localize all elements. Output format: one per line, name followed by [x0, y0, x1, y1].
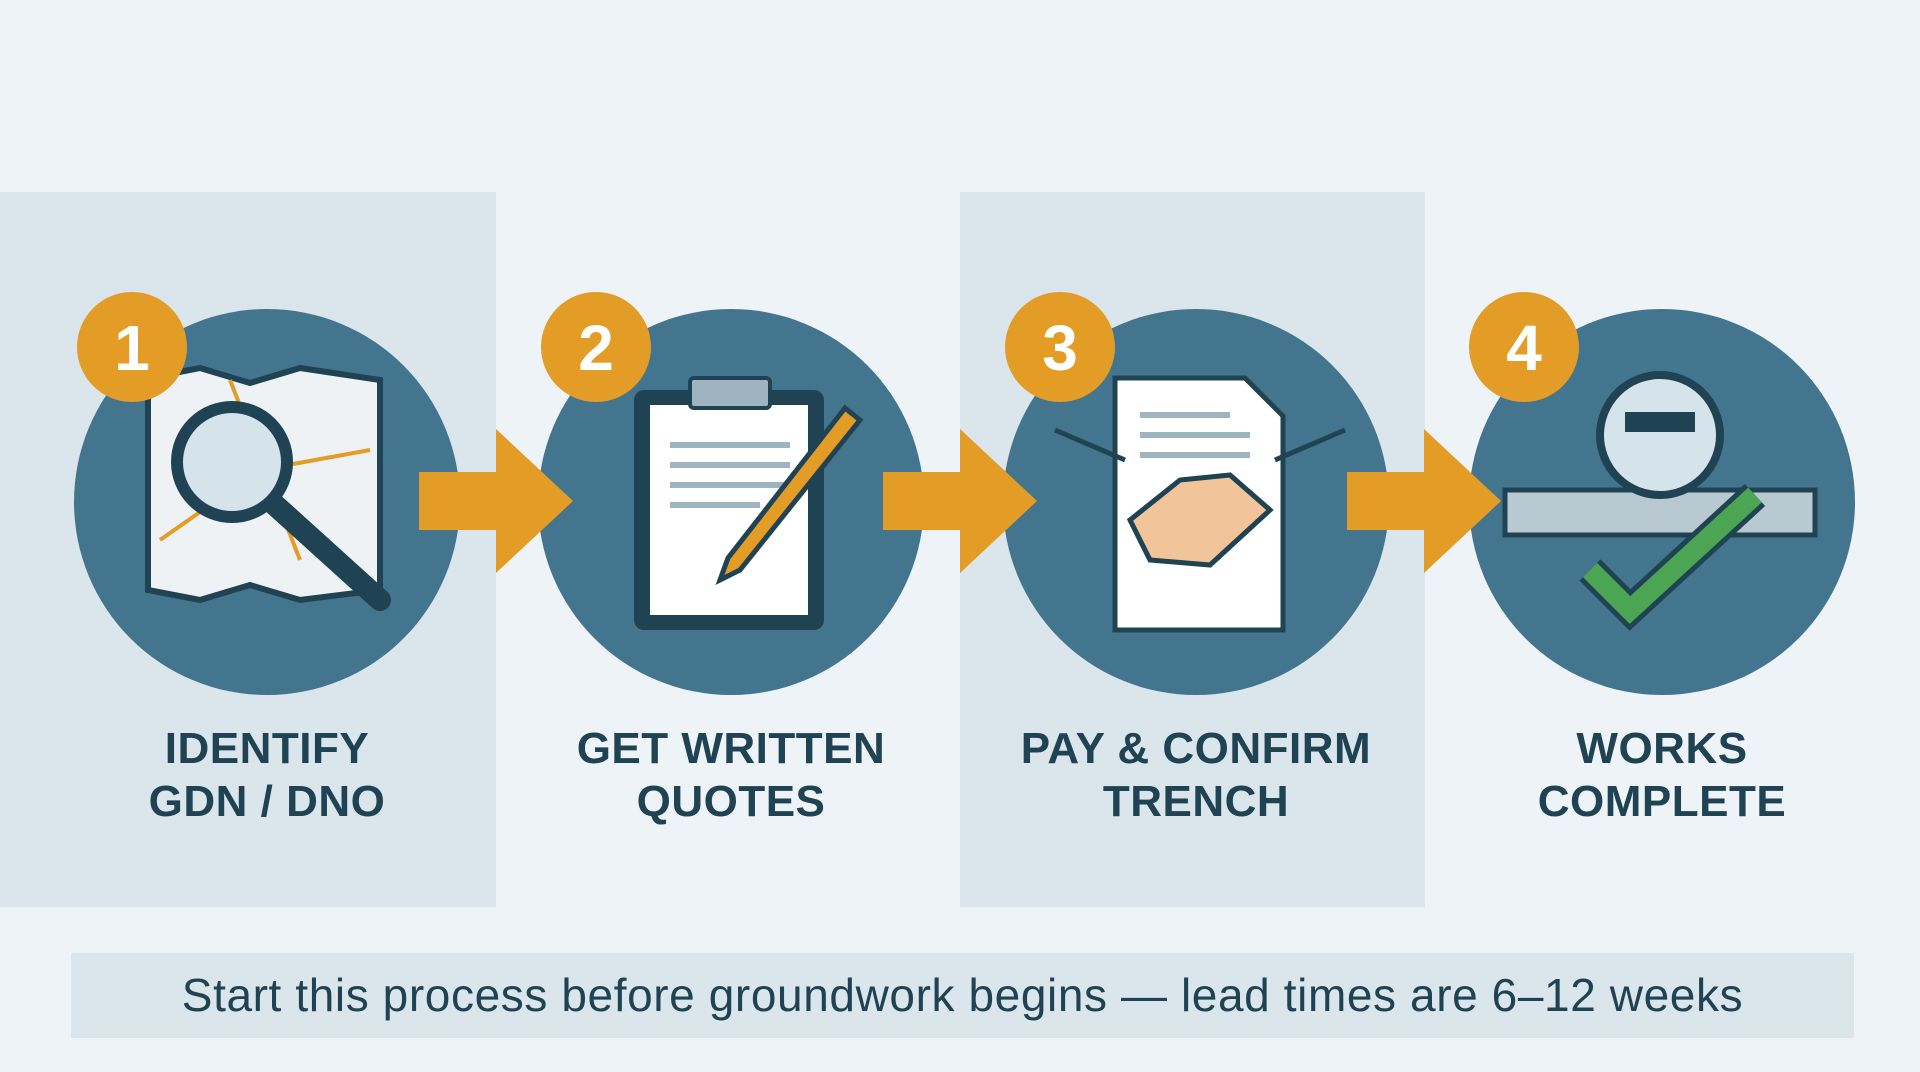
label step 3 — [1021, 724, 1371, 826]
arrow 2 — [883, 429, 1037, 573]
panel: step 1 background — [0, 192, 496, 907]
badge 2: 2 — [578, 312, 614, 384]
label step 1: IDENTIFY — [165, 724, 369, 773]
label step 4: WORKS — [1576, 724, 1748, 773]
badge 4: 4 — [1506, 312, 1542, 384]
arrow 1 — [419, 429, 573, 573]
badge 3: 3 — [1042, 312, 1078, 384]
badge 1 — [77, 292, 187, 402]
label step 1: GDN / DNO — [149, 777, 385, 826]
arrow 3 — [1347, 429, 1501, 573]
label step 3: TRENCH — [1103, 777, 1289, 826]
step 3 circle with handshake icon — [1003, 309, 1389, 695]
step 2 circle with clipboard icon — [538, 309, 924, 695]
label step 1 — [149, 724, 385, 826]
panel: step 3 background — [960, 192, 1425, 907]
badge 2 — [541, 292, 651, 402]
step 1 circle with map icon — [74, 309, 460, 695]
label step 3: PAY & CONFIRM — [1021, 724, 1371, 773]
label step 4: COMPLETE — [1538, 777, 1786, 826]
bottom note bar — [71, 953, 1854, 1038]
badge 4 — [1469, 292, 1579, 402]
badge 1: 1 — [114, 312, 150, 384]
step 4 circle with meter and checkmark icon — [1469, 309, 1855, 695]
badge 3 — [1005, 292, 1115, 402]
label step 4 — [1538, 724, 1786, 826]
label step 2: QUOTES — [637, 777, 825, 826]
bottom note bar: Start this process before groundwork begins — lead times are 6–12 weeks — [182, 969, 1743, 1021]
label step 2 — [577, 724, 885, 826]
label step 2: GET WRITTEN — [577, 724, 885, 773]
